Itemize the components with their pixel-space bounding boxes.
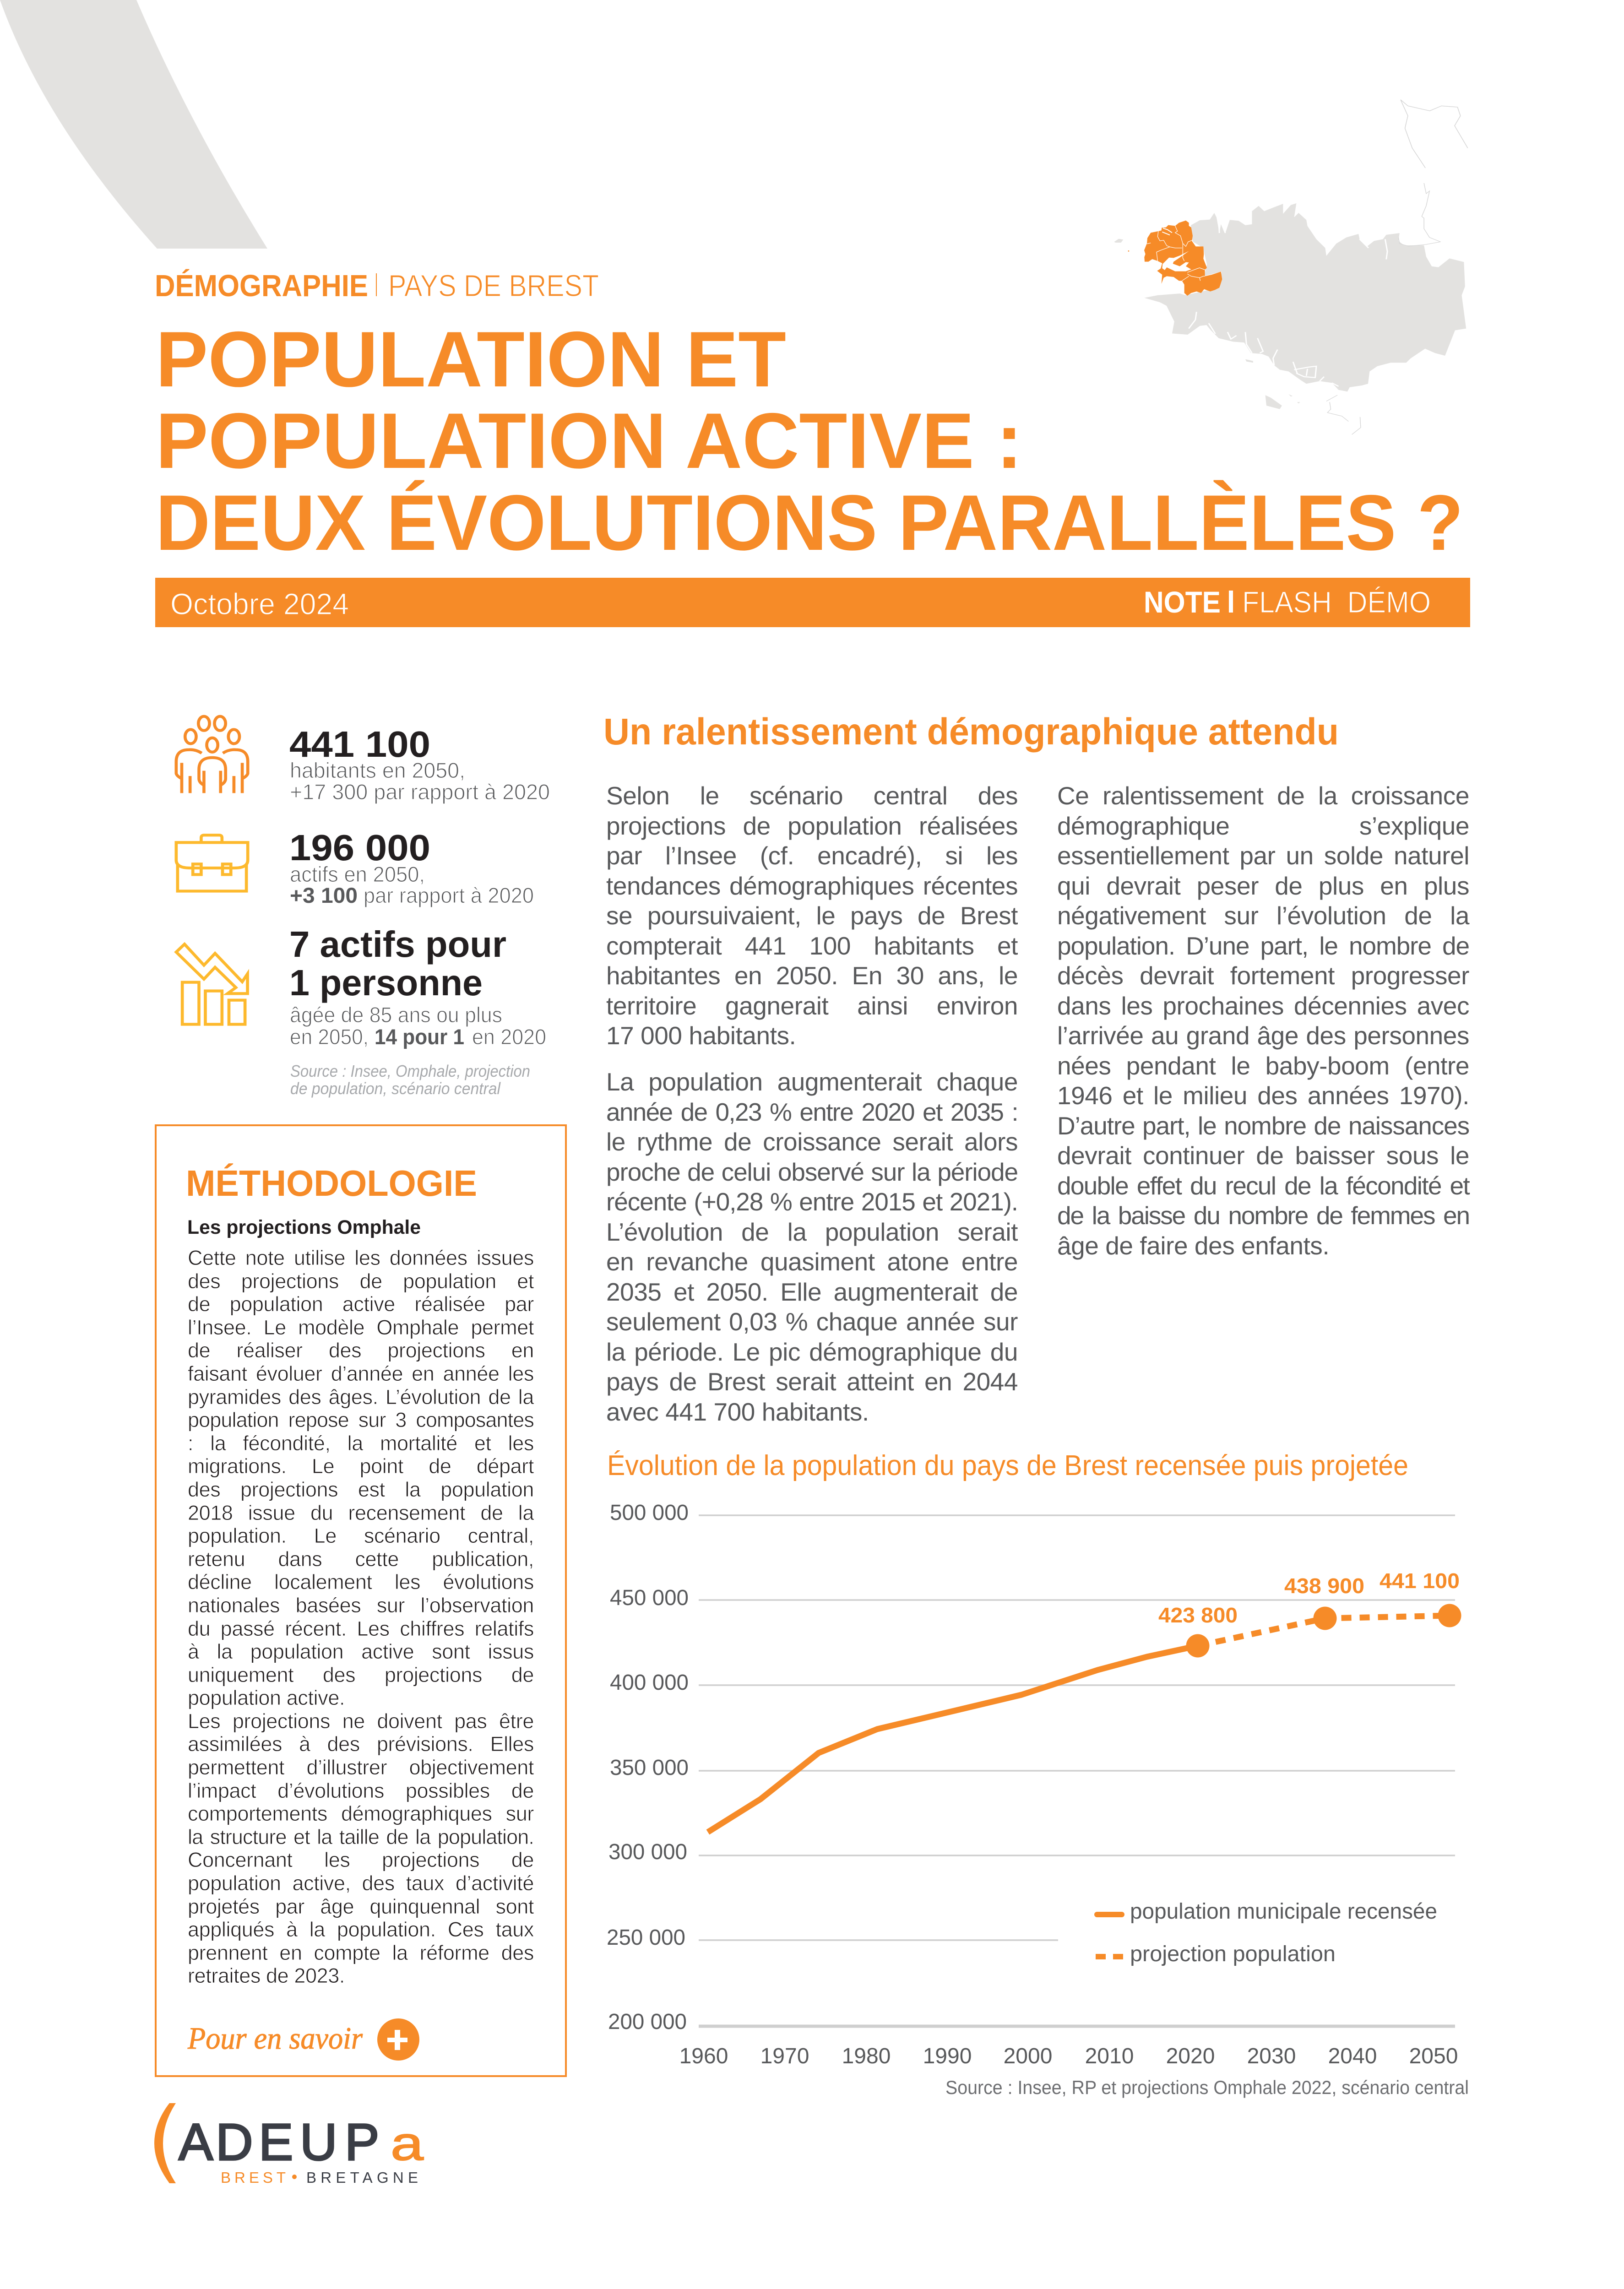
x axis labels: 1980 (842, 2044, 891, 2068)
key figure: ratio: en 2020 (472, 1025, 546, 1049)
methodology body text: retraites de 2023. (188, 1964, 345, 1987)
Brittany landmass and coast (1144, 183, 1466, 434)
methodology body text: Les projections ne doivent pas être (188, 1709, 534, 1733)
logo ADEUPa: BRETAGNE (306, 2169, 418, 2186)
text column 2: dans les prochaines décennies avec (1057, 992, 1469, 1020)
text column 1 paragraph 2: seulement 0,03 % chaque année sur (606, 1307, 1018, 1336)
text column 1 paragraph 1: 17 000 habitants. (606, 1021, 796, 1050)
main title: POPULATION ET (156, 315, 786, 403)
legend (1096, 1899, 1437, 1966)
methodology body text: appliqués à la population. Ces taux (188, 1918, 534, 1941)
text column 1 paragraph 2 (606, 1067, 1018, 1427)
text column 2: décès devrait fortement progresser (1057, 961, 1469, 990)
key figures source (290, 1062, 530, 1098)
key figure: ratio: âgée de 85 ans ou plus (290, 1003, 502, 1027)
projected population line (1198, 1616, 1450, 1646)
y axis labels (607, 1501, 689, 2034)
methodology body text: l’impact d’évolutions possibles de (188, 1779, 534, 1802)
methodology body text: retenu dans cette publication, (188, 1547, 534, 1571)
y axis labels: 200 000 (608, 2010, 687, 2034)
methodology body text: Cette note utilise les données issues (188, 1246, 534, 1269)
Cotentin outline (1401, 100, 1468, 168)
methodology body text: : la fécondité, la mortalité et les (188, 1432, 534, 1455)
logo ADEUPa: BREST (221, 2169, 286, 2186)
x axis labels: 2030 (1247, 2044, 1296, 2068)
methodology body text: migrations. Le point de départ (188, 1454, 534, 1478)
icon: falling chart (176, 944, 248, 1025)
date banner: FLASH DÉMO (1242, 585, 1431, 619)
key figure: population: +17 300 par rapport à 2020 (290, 780, 550, 804)
text column 2: D’autre part, le nombre de naissances (1057, 1112, 1469, 1140)
grid lines (699, 1515, 1455, 2026)
x axis labels: 1960 (679, 2044, 728, 2068)
legend: population municipale recensée (1130, 1899, 1437, 1924)
text column 2: âge de faire des enfants. (1057, 1231, 1329, 1260)
text column 1 paragraph 2: récente (+0,28 % entre 2015 et 2021). (606, 1188, 1018, 1216)
text column 1 paragraph 1 (606, 781, 1018, 1051)
text column 2: double effet du recul de la fécondité et (1057, 1171, 1469, 1199)
y axis labels: 450 000 (610, 1586, 689, 1610)
text column 1 paragraph 2: 2035 et 2050. Elle augmenterait de (606, 1277, 1018, 1306)
key figure: workforce: 196 000 (289, 827, 430, 868)
text column 1 paragraph 2: pays de Brest serait atteint en 2044 (606, 1367, 1018, 1396)
key figure: population: habitants en 2050, (290, 758, 465, 782)
text column 1 paragraph 2: La population augmenterait chaque (606, 1068, 1018, 1096)
methodology body text: du passé récent. Les chiffres relatifs (188, 1617, 534, 1640)
kicker heading: DÉMOGRAPHIE (155, 269, 368, 303)
text column 1 paragraph 1: tendances démographiques récentes (606, 872, 1018, 900)
text column 2: qui devrait peser de plus en plus (1057, 872, 1469, 900)
link: pour en savoir plus: Pour en savoir (187, 2021, 363, 2056)
data labels (1158, 1569, 1460, 1627)
methodology body text: uniquement des projections de (188, 1663, 534, 1687)
y axis labels: 350 000 (610, 1756, 689, 1780)
key figure: ratio: en 2050, (290, 1025, 369, 1049)
text column 1 paragraph 1: par l’Insee (cf. encadré), si les (606, 841, 1018, 870)
methodology body text: de réaliser des projections en (188, 1339, 534, 1362)
data labels: 441 100 (1380, 1569, 1460, 1593)
text column 1 paragraph 1: Selon le scénario central des (606, 781, 1018, 810)
text column 2 (1057, 781, 1469, 1261)
date banner: Octobre 2024 (170, 587, 349, 621)
key figures source: Source : Insee, Omphale, projection (290, 1062, 530, 1080)
methodology heading: MÉTHODOLOGIE (186, 1163, 477, 1204)
key figure: ratio: 7 actifs pour (289, 924, 506, 965)
main title: POPULATION ACTIVE : (156, 397, 1022, 485)
map of Brittany with Pays de Brest highlighted (1114, 100, 1468, 434)
decorative swoosh (0, 0, 267, 249)
section heading: Un ralentissement démographique attendu (603, 711, 1339, 753)
text column 1 paragraph 1: se poursuivaient, le pays de Brest (606, 901, 1018, 930)
chart: population evolution (607, 1450, 1469, 2098)
methodology subheading: Les projections Omphale (187, 1216, 421, 1238)
main title (156, 315, 1463, 567)
key figure: workforce: actifs en 2050, (290, 862, 425, 886)
key figure: population (176, 716, 550, 804)
methodology body text: faisant évoluer d’année en année les (188, 1362, 534, 1385)
legend: projection population (1130, 1942, 1336, 1966)
methodology body text: population repose sur 3 composantes (188, 1408, 534, 1432)
x axis labels: 2040 (1328, 2044, 1377, 2068)
x axis labels: 2050 (1409, 2044, 1458, 2068)
methodology body text: à la population active sont issus (188, 1640, 534, 1663)
key figure: workforce: +3 100 (290, 883, 358, 907)
y axis labels: 300 000 (608, 1840, 687, 1864)
y axis labels: 400 000 (610, 1671, 689, 1695)
methodology body text: population active. (188, 1686, 345, 1709)
text column 1 paragraph 2: avec 441 700 habitants. (606, 1397, 869, 1426)
methodology body text (188, 1247, 534, 1988)
methodology body text: des projections de population et (188, 1269, 534, 1293)
methodology body text: décline localement les évolutions (188, 1570, 534, 1594)
text column 2: négativement sur l’évolution de la (1057, 901, 1469, 930)
methodology body text: pyramides des âges. L’évolution de la (188, 1385, 534, 1409)
text column 2: démographique s’explique (1057, 811, 1469, 840)
methodology body text: population active, des taux d’activité (188, 1871, 534, 1895)
key figure: ratio: 14 pour 1 (375, 1025, 464, 1049)
logo ADEUPa: ADEUP (179, 2113, 379, 2171)
text column 1 paragraph 2: proche de celui observé sur la période (606, 1157, 1018, 1186)
date banner: NOTE (1144, 585, 1221, 619)
data points (1186, 1604, 1461, 1657)
logo ADEUPa (154, 2103, 424, 2186)
methodology body text: Concernant les projections de (188, 1848, 534, 1871)
link: pour en savoir plus (187, 2018, 419, 2061)
x axis labels: 2010 (1085, 2044, 1134, 2068)
methodology body text: population. Le scénario central, (188, 1524, 534, 1547)
icon: people (176, 716, 248, 793)
text column 2: 1946 et le milieu des années 1970). (1057, 1081, 1469, 1110)
methodology body text: 2018 issue du recensement de la (188, 1501, 534, 1524)
text column 1 paragraph 2: la période. Le pic démographique du (606, 1338, 1018, 1366)
kicker heading: PAYS DE BREST (388, 269, 599, 303)
x axis labels: 2020 (1166, 2044, 1215, 2068)
x axis labels: 1970 (760, 2044, 809, 2068)
text column 1 paragraph 2: le rythme de croissance serait alors (606, 1128, 1018, 1156)
methodology body text: prennent en compte la réforme des (188, 1941, 534, 1964)
text column 2: de la baisse du nombre de femmes en (1057, 1201, 1469, 1230)
text column 2: essentiellement par un solde naturel (1057, 841, 1469, 870)
x axis labels (679, 2044, 1458, 2068)
data labels: 423 800 (1158, 1603, 1238, 1627)
text column 1 paragraph 1: territoire gagnerait ainsi environ (606, 992, 1018, 1020)
chart source: Source : Insee, RP et projections Omphale 2022, scénario central (945, 2077, 1469, 2098)
key figure: ratio (176, 924, 546, 1049)
key figure: workforce: par rapport à 2020 (364, 883, 534, 907)
y axis labels: 250 000 (607, 1926, 685, 1950)
methodology body text: l’Insee. Le modèle Omphale permet (188, 1316, 534, 1339)
methodology body text: la structure et la taille de la population. (188, 1825, 534, 1849)
x axis labels: 2000 (1004, 2044, 1052, 2068)
text column 1 paragraph 2: en revanche quasiment atone entre (606, 1248, 1018, 1276)
date banner (155, 578, 1470, 627)
logo ADEUPa: a (391, 2117, 424, 2170)
methodology body text: des projections est la population (188, 1478, 534, 1501)
methodology body text: assimilées à des prévisions. Elles (188, 1732, 534, 1756)
text column 1 paragraph 2: année de 0,23 % entre 2020 et 2035 : (606, 1098, 1018, 1126)
methodology body text: nationales basées sur l’observation (188, 1594, 534, 1617)
methodology body text: de population active réalisée par (188, 1292, 534, 1316)
methodology body text: projetés par âge quinquennal sont (188, 1895, 534, 1918)
x axis labels: 1990 (923, 2044, 972, 2068)
text column 2: nées pendant le baby-boom (entre (1057, 1051, 1469, 1079)
key figure: population: 441 100 (289, 724, 430, 765)
kicker heading (155, 269, 599, 303)
icon: briefcase (176, 835, 248, 891)
y axis labels: 500 000 (610, 1501, 689, 1525)
text column 1 paragraph 2: L’évolution de la population serait (606, 1218, 1018, 1246)
Pays de Brest territory (1114, 221, 1222, 296)
chart title: Évolution de la population du pays de Brest recensée puis projetée (607, 1450, 1408, 1481)
methodology body text: permettent d’illustrer objectivement (188, 1756, 534, 1779)
text column 2: Ce ralentissement de la croissance (1057, 781, 1469, 810)
main title: DEUX ÉVOLUTIONS PARALLÈLES ? (156, 479, 1463, 567)
key figures source: de population, scénario central (290, 1079, 501, 1098)
methodology body text: comportements démographiques sur (188, 1802, 534, 1825)
text column 1 paragraph 1: compterait 441 100 habitants et (606, 931, 1018, 960)
recorded population line (708, 1646, 1198, 1832)
text column 1 paragraph 1: projections de population réalisées (606, 811, 1018, 840)
text column 2: population. D’une part, le nombre de (1057, 931, 1469, 960)
text column 2: devrait continuer de baisser sous le (1057, 1141, 1469, 1170)
panel: methodology (155, 1124, 567, 2077)
key figure: ratio: 1 personne (289, 962, 483, 1003)
data labels: 438 900 (1284, 1574, 1364, 1598)
text column 2: l’arrivée au grand âge des personnes (1057, 1021, 1469, 1050)
text column 1 paragraph 1: habitantes en 2050. En 30 ans, le (606, 961, 1018, 990)
key figure: workforce (176, 827, 534, 907)
